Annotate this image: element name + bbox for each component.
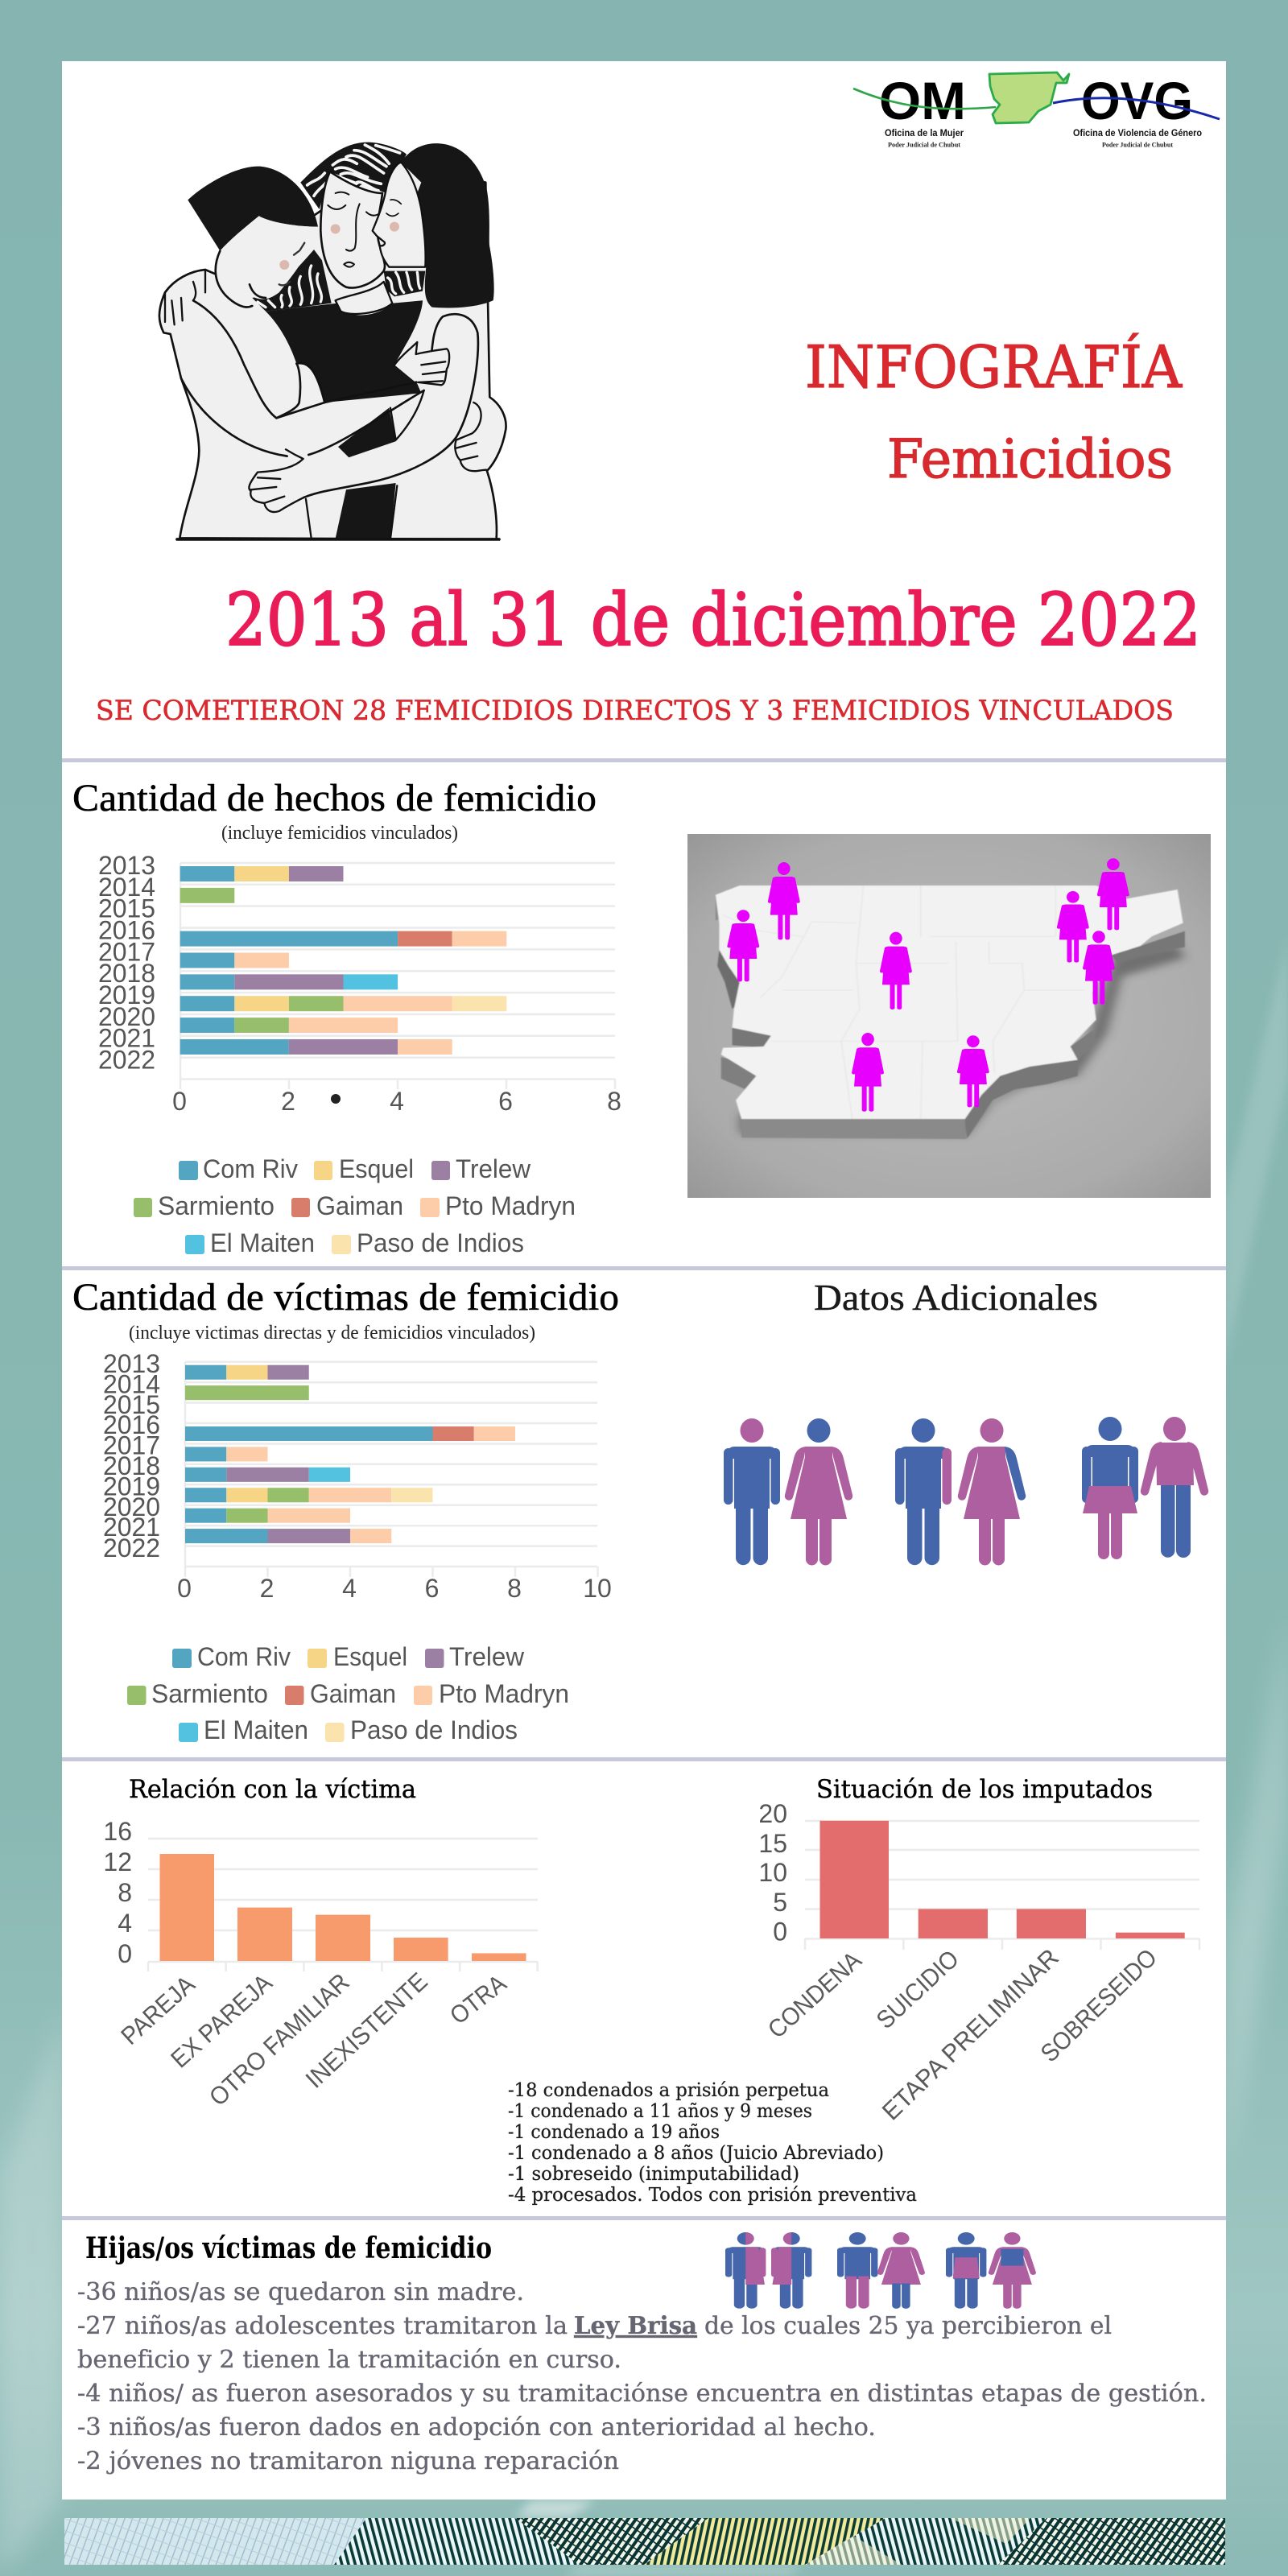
chart: hechos stacked bars: 2022 — [98, 1045, 155, 1074]
note: incluye femicidios vinculados: (incluye femicidios vinculados) — [221, 823, 458, 844]
text block: sentencias: -18 condenados a prisión perpetua — [508, 2080, 829, 2101]
illustration: three women embracing — [159, 142, 506, 539]
chart: hechos stacked bars: 6 — [498, 1087, 513, 1116]
chart: víctimas stacked bars: 2014 — [103, 1370, 160, 1399]
chart: víctimas stacked bars: 2015 — [103, 1390, 160, 1419]
legend: víctimas: Pto Madryn — [439, 1679, 569, 1708]
note: incluye víctimas directas: (incluye victimas directas y de femicidios vinculados) — [129, 1323, 535, 1344]
chart: víctimas stacked bars: 2016 — [103, 1410, 160, 1439]
chart: hechos stacked bars: 2016 — [98, 916, 155, 945]
icon: gender figures, pair 3 — [1082, 1417, 1208, 1559]
chart: hechos stacked bars: 2014 — [98, 873, 155, 902]
chart: víctimas stacked bars: 2017 — [103, 1431, 160, 1460]
heading: situación de los imputados: Situación de los imputados — [816, 1775, 1153, 1804]
chart: relación bars: 8 — [118, 1878, 132, 1907]
legend: hechos: Gaiman — [316, 1191, 403, 1220]
text block: sentencias: -4 procesados. Todos con prisión preventiva — [508, 2185, 917, 2206]
chart: hechos stacked bars: 2021 — [98, 1024, 155, 1053]
subtitle: Femicidios: Femicidios — [887, 428, 1173, 490]
text block: hijas/os datos: beneficio y 2 tienen la tramitación en curso. — [77, 2346, 621, 2374]
chart: hechos stacked bars: 2013 — [98, 851, 155, 880]
chart: situación bars — [758, 1799, 1199, 2125]
icon: gender figures, pair 1 — [724, 1418, 852, 1565]
chart: situación bars: 15 — [758, 1829, 787, 1858]
chart: víctimas stacked bars: 2022 — [103, 1534, 160, 1563]
chart: situación bars: 0 — [773, 1918, 787, 1946]
icon: gender figures, pair 2 — [895, 1418, 1026, 1565]
legend: víctimas: Paso de Indios — [350, 1715, 518, 1744]
panel: cantidad de víctimas — [72, 1276, 619, 1744]
chart: víctimas stacked bars: 2021 — [103, 1513, 160, 1542]
chart: hechos stacked bars: 0 — [172, 1087, 187, 1116]
logo: OM and OVG: OM — [879, 71, 966, 130]
title: INFOGRAFÍA: INFOGRAFÍA — [805, 332, 1183, 401]
legend: víctimas: Gaiman — [310, 1679, 396, 1708]
chart: víctimas stacked bars: 4 — [342, 1574, 357, 1603]
text block: hijas/os datos: -36 niños/as se quedaron sin madre. — [77, 2278, 524, 2306]
chart: hechos stacked bars: 4 — [390, 1087, 404, 1116]
text block: sentencias: -1 condenado a 11 años y 9 meses — [508, 2101, 812, 2122]
legend: hechos: Com Riv — [203, 1154, 298, 1183]
legend: hechos: Pto Madryn — [445, 1191, 576, 1220]
chart: víctimas stacked bars: 0 — [177, 1574, 192, 1603]
text block: hijas/os datos: de los cuales 25 ya percibieron el — [704, 2312, 1112, 2340]
chart: relación bars: 12 — [103, 1847, 132, 1876]
decorative banknote strip — [64, 2518, 1225, 2565]
legend: hechos: Esquel — [339, 1154, 414, 1183]
legend: víctimas: Sarmiento — [151, 1679, 268, 1708]
icon: small gender figures — [725, 2232, 1036, 2309]
chart: hechos stacked bars: 2020 — [98, 1002, 155, 1031]
legend: hechos: Sarmiento — [158, 1191, 275, 1220]
legend: hechos — [134, 1154, 576, 1257]
text block: sentencias — [508, 2080, 917, 2206]
chart: relación bars: 0 — [118, 1939, 132, 1968]
chart: hechos stacked bars — [98, 851, 621, 1116]
legend: víctimas — [127, 1642, 569, 1744]
chart: hechos stacked bars: 2015 — [98, 894, 155, 923]
panel: situación de los imputados — [758, 1775, 1199, 2125]
chart: hechos stacked bars: 2019 — [98, 980, 155, 1009]
chart: víctimas stacked bars: 2019 — [103, 1472, 160, 1501]
heading: hijas/os víctimas: Hijas/os víctimas de femicidio — [85, 2231, 492, 2265]
chart: situación bars: SOBRESEIDO — [1035, 1943, 1162, 2067]
chart: relación bars — [103, 1817, 538, 2112]
summary statement: SE COMETIERON 28 FEMICIDIOS DIRECTOS Y 3 FEMICIDIOS VINCULADOS — [96, 695, 1174, 727]
chart: víctimas stacked bars: 2018 — [103, 1451, 160, 1480]
text block: sentencias: -1 condenado a 8 años (Juicio Abreviado) — [508, 2143, 884, 2164]
text block: hijas/os datos: -27 niños/as adolescentes tramitaron la — [77, 2312, 568, 2340]
chart: víctimas stacked bars — [103, 1349, 612, 1603]
heading: Datos Adicionales: Datos Adicionales — [814, 1277, 1098, 1318]
chart: víctimas stacked bars: 2020 — [103, 1492, 160, 1521]
text block: sentencias: -1 condenado a 19 años — [508, 2122, 720, 2143]
chart: hechos stacked bars: 2018 — [98, 959, 155, 988]
logo: OM and OVG — [853, 71, 1220, 148]
logo: OM and OVG: Oficina de la Mujer — [885, 129, 964, 138]
heading: relación con la víctima: Relación con la víctima — [129, 1775, 416, 1804]
chart: relación bars: EX PAREJA — [165, 1968, 278, 2074]
chart: hechos stacked bars: 8 — [607, 1087, 621, 1116]
panel: relación con la víctima — [103, 1775, 538, 2112]
text block: hijas/os datos: -2 jóvenes no tramitaron niguna reparación — [77, 2447, 619, 2475]
chart: víctimas stacked bars: 2 — [260, 1574, 274, 1603]
chart: víctimas stacked bars: 6 — [425, 1574, 439, 1603]
text block: sentencias: -1 sobreseido (inimputabilidad) — [508, 2164, 799, 2185]
legend: hechos: El Maiten — [210, 1228, 315, 1257]
text block: hijas/os datos: -3 niños/as fueron dados en adopción con anterioridad al hecho. — [77, 2413, 876, 2442]
logo: OM and OVG: Poder Judicial de Chubut — [888, 142, 960, 148]
legend: hechos: Paso de Indios — [357, 1228, 524, 1257]
chart: situación bars: 20 — [758, 1799, 787, 1828]
chart: víctimas stacked bars: 2013 — [103, 1349, 160, 1378]
panel: cantidad de hechos — [72, 777, 621, 1257]
chart: situación bars: SUICIDIO — [871, 1945, 964, 2034]
chart: relación bars: 4 — [118, 1909, 132, 1938]
logo: OM and OVG: Oficina de Violencia de Género — [1073, 129, 1202, 138]
chart: hechos stacked bars: 2017 — [98, 937, 155, 966]
text block: hijas/os datos: -4 niños/ as fueron asesorados y su tramitaciónse encuentra en distintas etapas de gestión. — [77, 2380, 1207, 2408]
chart: relación bars: OTRA — [444, 1969, 512, 2030]
chart: víctimas stacked bars: 8 — [507, 1574, 522, 1603]
legend: víctimas: Com Riv — [197, 1642, 291, 1671]
legend: hechos: Trelew — [456, 1154, 531, 1183]
chart: relación bars: OTRO FAMILIAR — [204, 1968, 355, 2112]
heading: cantidad de víctimas: Cantidad de víctimas de femicidio — [72, 1276, 619, 1319]
legend: víctimas: Esquel — [333, 1642, 407, 1671]
chart: situación bars: 10 — [758, 1858, 787, 1887]
chart: hechos stacked bars: 2 — [281, 1087, 295, 1116]
chart: situación bars: CONDENA — [762, 1946, 867, 2044]
logo: OM and OVG: Poder Judicial de Chubut — [1102, 142, 1173, 148]
chart: relación bars: INEXISTENTE — [300, 1967, 433, 2094]
text block: hijas/os datos: Ley Brisa — [574, 2312, 697, 2340]
chart: víctimas stacked bars: 10 — [583, 1574, 612, 1603]
chart: relación bars: PAREJA — [116, 1970, 200, 2050]
heading: cantidad de hechos: Cantidad de hechos de femicidio — [72, 777, 597, 819]
map: Chubut with magenta pins — [687, 834, 1211, 1198]
legend: víctimas: El Maiten — [204, 1715, 308, 1744]
legend: víctimas: Trelew — [449, 1642, 525, 1671]
logo: OM and OVG: OVG — [1081, 71, 1193, 130]
chart: situación bars: 5 — [773, 1888, 787, 1917]
chart: relación bars: 16 — [103, 1817, 132, 1846]
text block: hijas/os datos — [77, 2278, 1207, 2475]
chart: situación bars: ETAPA PRELIMINAR — [877, 1943, 1064, 2125]
